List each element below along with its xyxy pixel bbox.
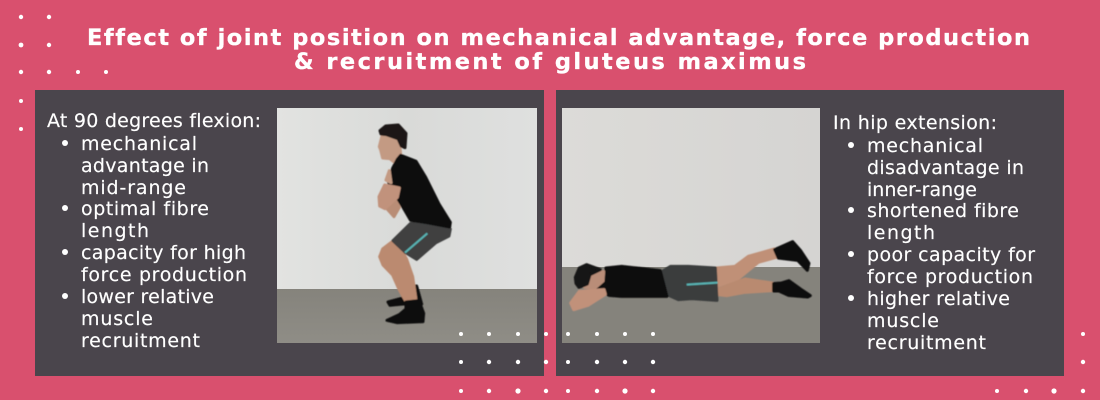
text block: extension points: muscle [867,310,939,332]
text block: extension points: In hip extension: [833,112,997,134]
hands and front arm [386,171,391,183]
back foot [388,286,422,305]
panel: 90 degrees flexion [35,90,544,376]
dot pattern: bottom centre [459,332,655,394]
shirt [596,266,667,296]
text block: extension points: poor capacity for [867,244,1035,266]
text block: extension points: shortened fibre [867,200,1019,222]
text block: extension points: inner-range [867,179,977,201]
text block: flexion points: muscle [81,308,153,330]
raised leg [717,249,776,286]
dot pattern: top left [19,15,108,131]
text block: flexion points [47,110,261,352]
arm [571,290,605,310]
text block: extension points: force production [867,266,1033,288]
text block: flexion points: advantage in [81,155,209,177]
text block: flexion points: mid-range [81,177,186,199]
raised sock [775,242,809,270]
text block: flexion points: force production [81,264,247,286]
text block: flexion points: mechanical [81,133,197,155]
title: Effect of joint position on mechanical advantage, force production [87,25,1030,51]
text block: extension points: mechanical [867,135,983,157]
panel: hip extension [556,90,1064,376]
neck and face [379,136,401,162]
text block: flexion points: length [81,220,149,242]
hair [380,125,406,148]
text block: extension points: length [867,222,935,244]
text block: extension points [833,112,1035,354]
text block: extension points: recruitment [867,332,986,354]
text block: flexion points: lower relative [81,286,214,308]
face [585,272,604,288]
shorts [393,223,450,259]
text block: flexion points: At 90 degrees flexion: [47,110,261,132]
dot pattern: bottom right [995,332,1085,394]
front foot [387,301,424,323]
hair [575,265,600,287]
back forearm [387,198,399,217]
photo: prone hip extension [562,108,820,343]
photo: squat at 90 degrees [277,108,537,343]
shirt [389,155,450,227]
text block: flexion points: optimal fibre [81,198,209,220]
title: & recruitment of gluteus maximus [294,49,806,75]
leg [380,241,416,301]
lower sock [774,281,810,297]
text block: flexion points: recruitment [81,330,200,352]
text block: flexion points: capacity for high [81,242,246,264]
text block: extension points: higher relative [867,288,1010,310]
text block: extension points: disadvantage in [867,157,1024,179]
title [87,25,1030,75]
shorts [663,266,717,300]
lower leg [718,279,772,296]
